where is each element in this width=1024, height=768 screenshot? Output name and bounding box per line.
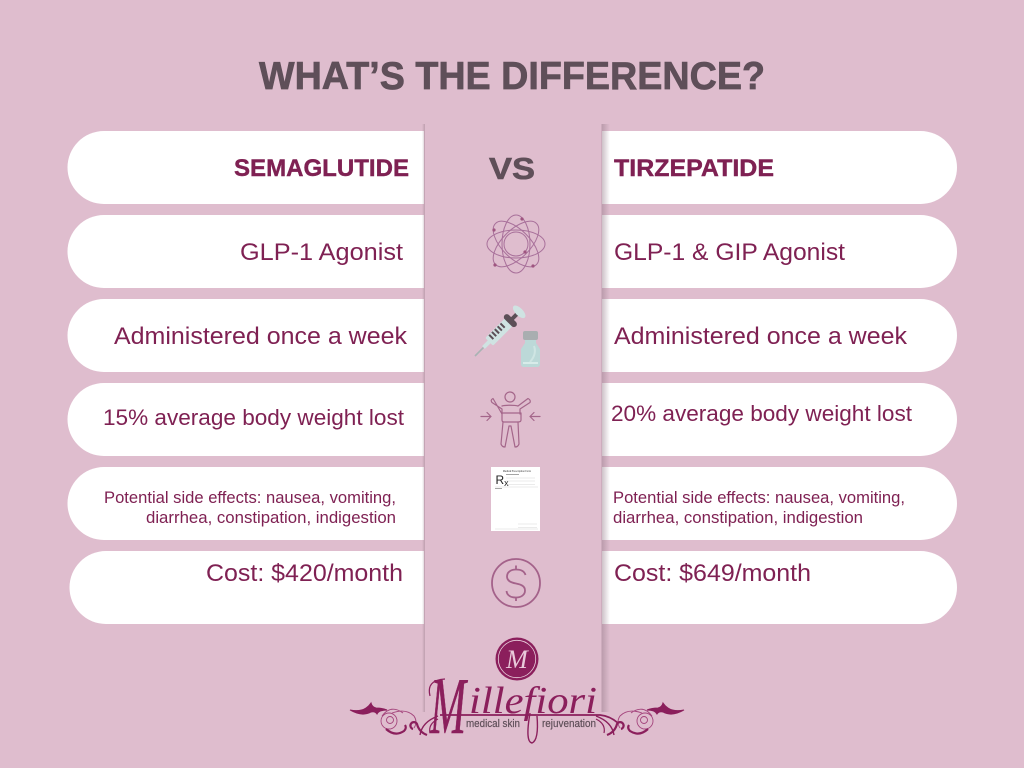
left column text: SEMAGLUTIDE — [234, 155, 409, 182]
logo tagline — [466, 718, 596, 730]
icon: body measuring waist — [481, 392, 540, 447]
panel: left column rows — [68, 131, 424, 624]
icon: prescription sheet: R — [496, 473, 504, 487]
icon: dollar coin — [492, 559, 540, 607]
logo tagline: rejuvenation — [542, 718, 596, 730]
VS label: VS — [489, 151, 535, 186]
title: WHAT’S THE DIFFERENCE? — [259, 55, 765, 98]
right column text: 20% average body weight lost — [611, 401, 912, 426]
panel: right column rows — [602, 131, 957, 624]
logo: Millefiori — [350, 638, 684, 751]
right column text: GLP-1 & GIP Agonist — [614, 239, 845, 266]
logo flourishes — [350, 679, 684, 743]
icon: prescription sheet — [491, 467, 540, 531]
logo wordmark: illefiori — [469, 680, 597, 722]
left column text: Potential side effects: nausea, vomiting, — [104, 489, 396, 507]
right column text: diarrhea, constipation, indigestion — [613, 509, 863, 527]
logo tagline: medical skin — [466, 718, 520, 730]
right column text: Cost: $649/month — [614, 560, 811, 587]
right column text: TIRZEPATIDE — [614, 155, 774, 182]
icon: prescription sheet: Medical Prescription Form — [503, 469, 531, 473]
left column text: Cost: $420/month — [206, 560, 403, 587]
left column text — [103, 155, 409, 587]
right column text — [611, 155, 912, 587]
logo wordmark — [429, 663, 597, 751]
icon: prescription sheet: x — [504, 478, 509, 488]
left column text: Administered once a week — [114, 323, 408, 350]
icon: atom — [486, 214, 546, 274]
panel: centre column — [422, 120, 610, 725]
left column text: GLP-1 Agonist — [240, 239, 403, 266]
right column text: Potential side effects: nausea, vomiting, — [613, 489, 905, 507]
left column text: diarrhea, constipation, indigestion — [146, 509, 396, 527]
logo emblem — [496, 638, 538, 680]
logo emblem: M — [505, 645, 529, 674]
icon: syringe and vial — [469, 303, 540, 367]
logo wordmark: M — [429, 663, 468, 751]
right column text: Administered once a week — [614, 323, 908, 350]
left column text: 15% average body weight lost — [103, 405, 404, 430]
